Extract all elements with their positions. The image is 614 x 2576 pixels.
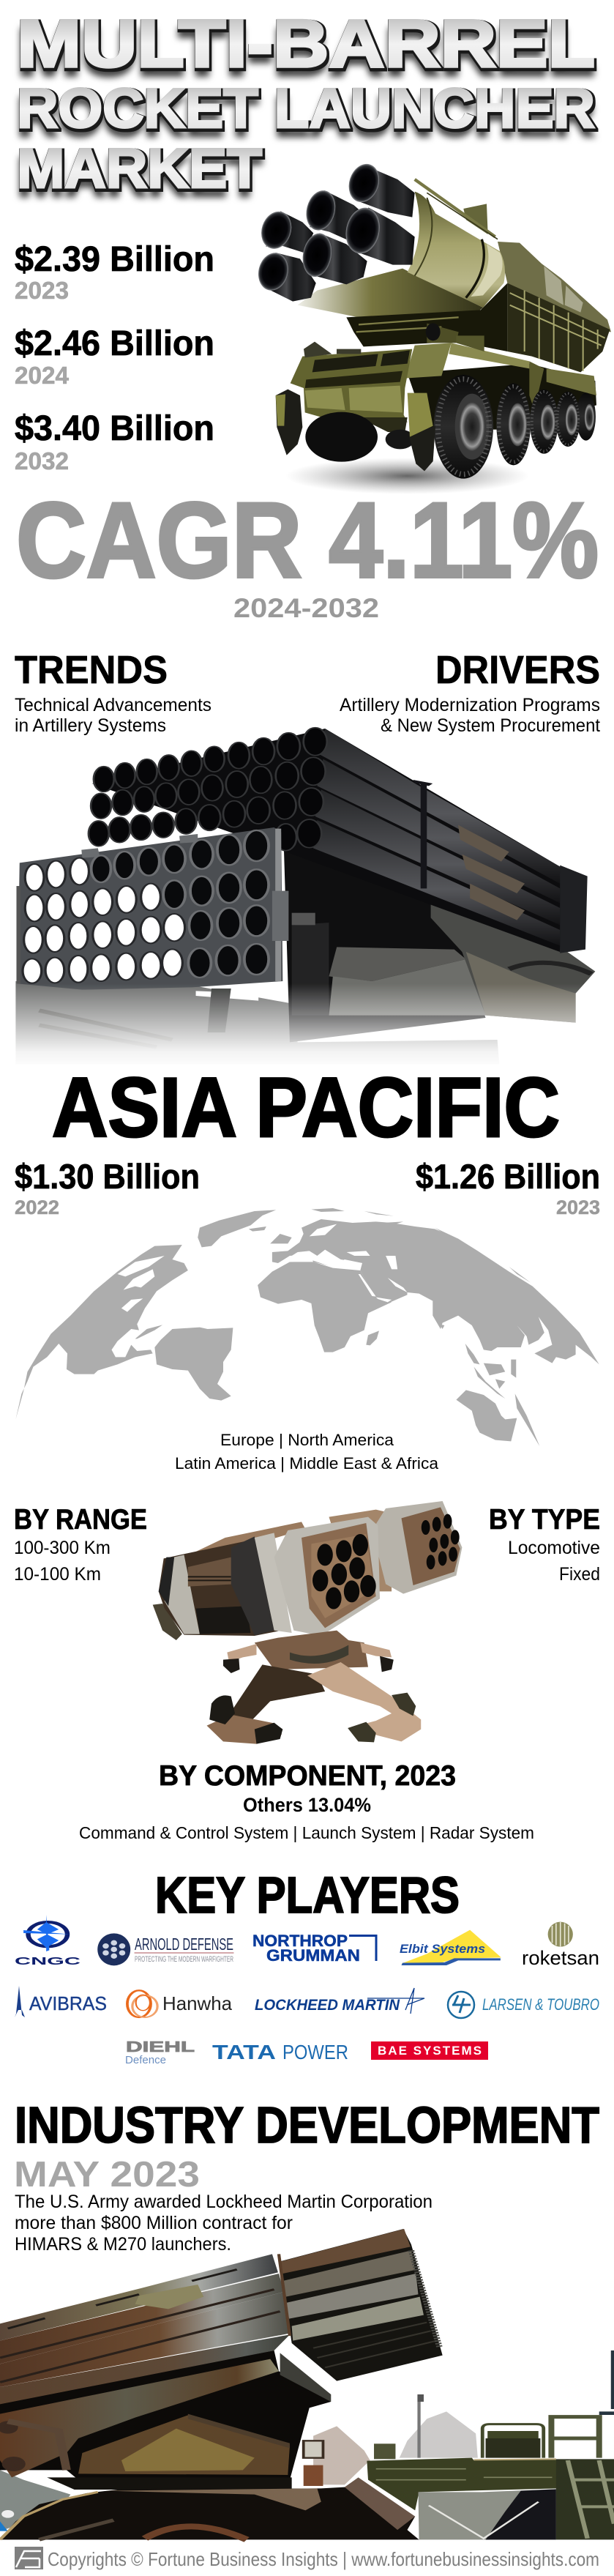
- segment: by type: [489, 1504, 600, 1585]
- logo: Diehl Defence: [125, 2039, 195, 2066]
- value: 2023: $2.39 Billion: [15, 240, 214, 279]
- logo: BAE Systems: [371, 2041, 488, 2060]
- CAGR figure: 2024-2032: [233, 593, 379, 623]
- value: 2023: 2023: [15, 277, 69, 304]
- logo: Lockheed Martin: [255, 1988, 424, 2014]
- logo: Larsen & Toubro: [448, 1992, 599, 2018]
- rust frame: [0, 2350, 331, 2490]
- title: Multi-Barrel Rocket Launcher Market: [17, 7, 595, 200]
- background trees and lamp: [0, 2394, 478, 2531]
- region heading: Asia Pacific: ASIA PACIFIC: [52, 1061, 560, 1155]
- south america: [154, 1328, 233, 1401]
- value: 2032: 2032: [15, 447, 69, 474]
- panel: industry development: MAY 2023: [14, 2155, 200, 2195]
- barrels: [92, 729, 588, 953]
- logo: Tata Power: [212, 2041, 348, 2063]
- under structure: [284, 849, 595, 1042]
- southeast asia islands: [465, 1344, 479, 1364]
- mud flaps: [276, 390, 435, 471]
- other regions list: Latin America | Middle East & Africa: [175, 1454, 439, 1473]
- panel: trends: Technical Advancements: [15, 695, 211, 715]
- segment: by type: BY TYPE: [489, 1504, 600, 1535]
- logo: CNGC: CNGC: [15, 1955, 81, 1968]
- region value: 2023: 2023: [556, 1196, 600, 1218]
- value: 2032: [15, 409, 214, 474]
- logo: Roketsan: roketsan: [522, 1947, 599, 1969]
- region value: 2022: $1.30 Billion: [15, 1157, 200, 1196]
- logo: Northrop Grumman: [252, 1932, 376, 1965]
- lower frame: [15, 981, 499, 1064]
- logo: Arnold Defense: PROTECTING THE MODERN WARFIGHTER: [135, 1955, 233, 1964]
- value: 2024: [15, 324, 214, 389]
- logo: Northrop Grumman: NORTHROP: [252, 1932, 348, 1950]
- segment: by range: 10-100 Km: [14, 1564, 101, 1585]
- logo: CNGC: [15, 1915, 81, 1968]
- australia: [456, 1390, 517, 1441]
- segment: by range: BY RANGE: [14, 1504, 147, 1535]
- damaged hull: [0, 2477, 419, 2539]
- logo: BAE Systems: BAE SYSTEMS: [378, 2044, 482, 2058]
- segment: by range: 100-300 Km: [14, 1538, 111, 1558]
- region value: 2023: [416, 1157, 600, 1218]
- logo: Tata Power: POWER: [282, 2041, 348, 2063]
- segment: by component: Others 13.04%: [243, 1794, 371, 1816]
- logo: Tata Power: TATA: [212, 2041, 276, 2063]
- value: 2032: $3.40 Billion: [15, 409, 214, 448]
- illustration: olive rocket launcher truck: [255, 160, 611, 494]
- region value: 2023: $1.26 Billion: [416, 1157, 600, 1196]
- green vehicle: [304, 2350, 614, 2539]
- arctic and pacific slivers: [311, 1208, 531, 1283]
- logo: Diehl Defence: DIEHL: [126, 2039, 195, 2055]
- photo: rusted launcher vehicle: [0, 2229, 614, 2539]
- logo: Avibras: [15, 1986, 107, 2017]
- title: Multi-Barrel Rocket Launcher Market: MARKET: [17, 138, 262, 200]
- africa: [258, 1262, 392, 1352]
- market values column: [15, 240, 214, 474]
- rear equipment and lattice: [463, 204, 611, 372]
- panel: drivers: DRIVERS: [435, 648, 600, 692]
- wheels: [305, 375, 596, 479]
- icon: Fortune Business Insights mark: [15, 2547, 43, 2569]
- logo: Roketsan: [522, 1922, 599, 1969]
- panel: industry development: [14, 2096, 599, 2255]
- logo: Elbit Systems: Elbit Systems: [400, 1942, 485, 1956]
- illustration: launcher tube pack: [12, 728, 599, 1069]
- segment: by component: [79, 1760, 534, 1842]
- other regions list: [175, 1431, 439, 1473]
- launch tubes: [255, 160, 415, 302]
- rocket canister: [408, 179, 505, 308]
- hole plate: [16, 827, 288, 990]
- world map globe: [15, 1208, 599, 1446]
- panel: trends: in Artillery Systems: [15, 715, 166, 736]
- logo: Avibras: AVIBRAS: [29, 1992, 107, 2014]
- logo: Elbit Systems: [400, 1930, 501, 1965]
- logo: Diehl Defence: Defence: [125, 2054, 166, 2066]
- under tray: [298, 269, 483, 317]
- logo: Hanwha: Hanwha: [162, 1992, 233, 2014]
- panel: trends: TRENDS: [15, 648, 168, 692]
- title: Multi-Barrel Rocket Launcher Market: MULTI-BARREL: [17, 7, 595, 81]
- logo: Arnold Defense: [97, 1933, 233, 1965]
- segment: by component: Command & Control System | Launch System | Radar System: [79, 1823, 534, 1842]
- north america: [15, 1245, 188, 1419]
- panel: industry development: more than $800 Million contract for: [15, 2213, 293, 2233]
- logo: Arnold Defense: ARNOLD DEFENSE: [135, 1935, 233, 1954]
- turret base and legs: [207, 1631, 421, 1744]
- title: Multi-Barrel Rocket Launcher Market: ROCKET LAUNCHER: [17, 78, 595, 140]
- panel: drivers: Artillery Modernization Programs: [340, 695, 600, 715]
- segment: by range: [14, 1504, 147, 1585]
- greenland and iceland: [198, 1210, 276, 1247]
- panel: drivers: & New System Procurement: [381, 715, 600, 736]
- launcher pod: [0, 2254, 290, 2407]
- inland water: [118, 1224, 408, 1312]
- front launch pod: [274, 1517, 380, 1636]
- value: 2024: $2.46 Billion: [15, 324, 214, 363]
- segment: by type: Fixed: [559, 1564, 600, 1585]
- panel: industry development: HIMARS & M270 launchers.: [15, 2234, 231, 2255]
- panel: drivers: [340, 648, 600, 736]
- logo: Lockheed Martin: LOCKHEED MARTIN: [255, 1997, 400, 2014]
- segment: by type: Locomotive: [508, 1538, 600, 1558]
- segment: by component: BY COMPONENT, 2023: [159, 1760, 456, 1792]
- tube mouths: [89, 728, 327, 851]
- region value: 2022: [15, 1157, 200, 1218]
- rear launch pod: [372, 1501, 462, 1594]
- panel: trends: [15, 648, 211, 736]
- other regions list: Europe | North America: [220, 1431, 394, 1449]
- value: 2024: 2024: [15, 362, 70, 389]
- chassis: [291, 323, 596, 432]
- panel: industry development: The U.S. Army awarded Lockheed Martin Corporation: [15, 2192, 433, 2212]
- value: 2023: [15, 240, 214, 304]
- illustration: rocket turret: [153, 1501, 462, 1744]
- heading: key players: KEY PLAYERS: [155, 1866, 460, 1924]
- logo: Northrop Grumman: GRUMMAN: [266, 1946, 360, 1965]
- region value: 2022: 2022: [15, 1196, 59, 1218]
- launcher tubes: [280, 2229, 443, 2381]
- logo: Hanwha: [127, 1990, 233, 2017]
- eurasia: [272, 1219, 599, 1364]
